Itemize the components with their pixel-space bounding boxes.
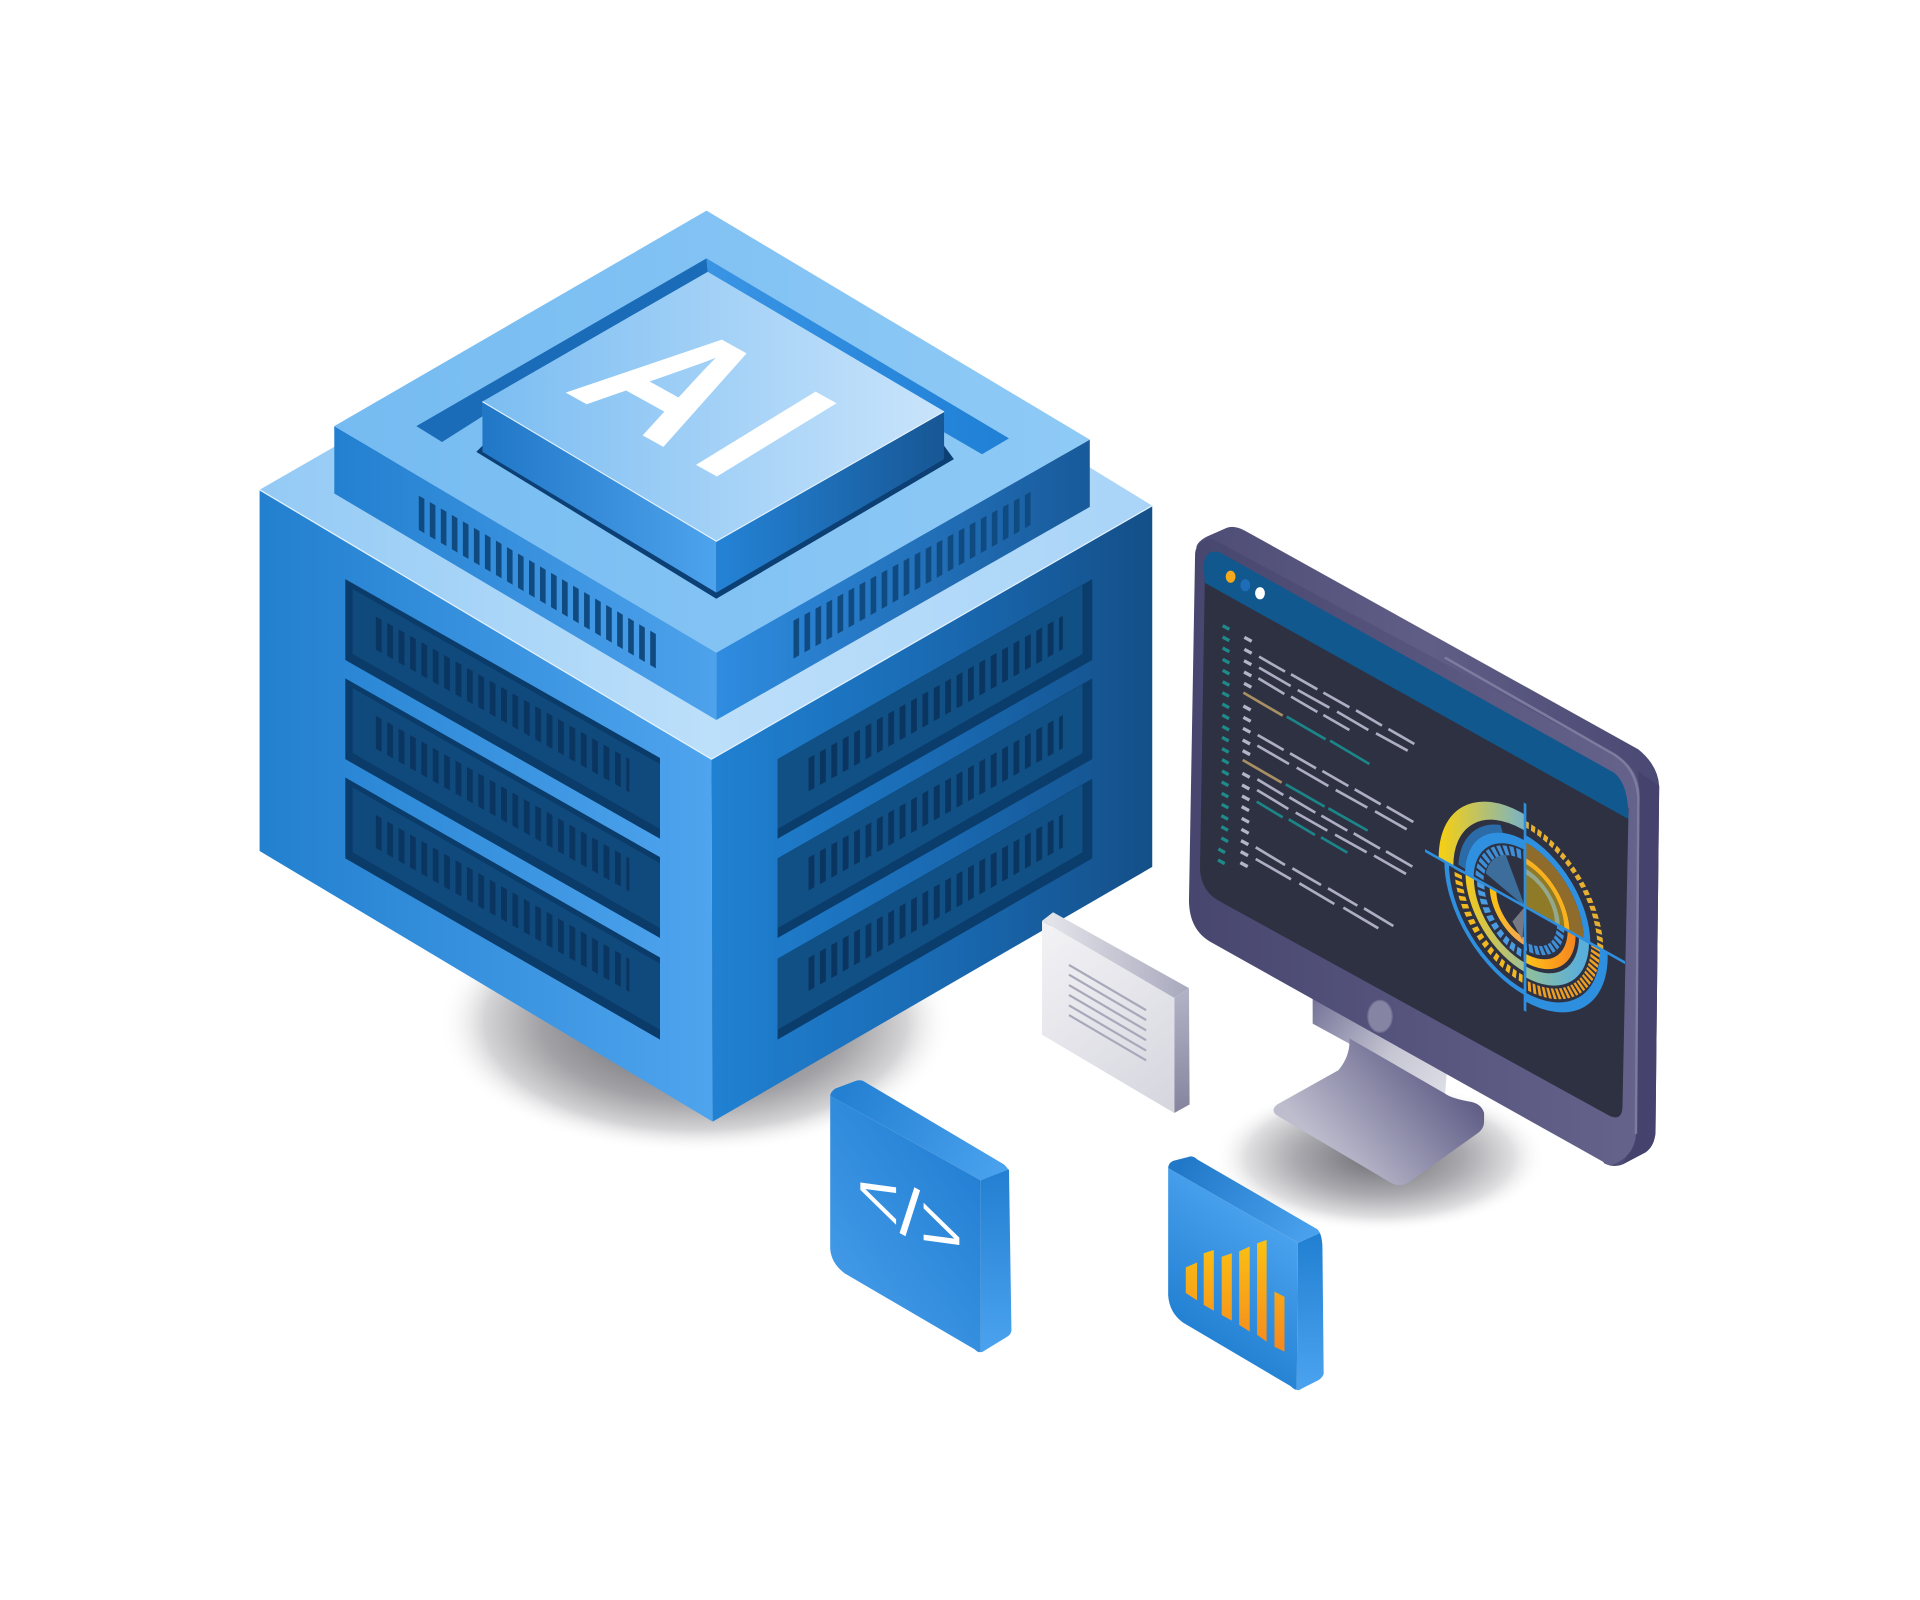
server shadow [438,891,953,1153]
AI lettering: AI [525,294,903,515]
right rack panel 3 [778,779,1092,1040]
monitor shadow [1213,1082,1547,1232]
window dots [1226,571,1265,599]
left rack panel 2 [345,678,660,938]
gauge upper-left quadrant [1438,802,1524,904]
monitor side [1622,771,1659,1164]
upper block top face [334,211,1090,653]
screen body [1200,576,1629,1117]
code symbol: </> [857,1142,963,1283]
AI server block [260,211,1152,1122]
right vent [791,491,1032,660]
chart card [1168,1156,1324,1390]
AI chip [482,272,944,593]
bar chart [1186,1240,1284,1352]
monitor back rim [1196,527,1659,1166]
white tokens [1240,637,1252,867]
gauge crosshair [1425,747,1625,1067]
radial gauge [1425,802,1625,1012]
chart card top edge [1168,1156,1320,1243]
tan code lines [1243,693,1283,783]
stand neck [1313,992,1447,1096]
right rack panel 2 [778,678,1092,938]
left vent [415,493,656,669]
code card face [830,1096,981,1352]
monitor [1189,527,1659,1166]
gauge lower-left quadrant [1444,863,1524,995]
monitor bezel [1189,539,1640,1166]
gauge upper-right quadrant [1526,821,1604,949]
code card [830,1080,1011,1352]
left rack panel 3 [345,778,660,1040]
gauge lower-right quadrant [1526,926,1608,1012]
upper block right face [716,440,1090,720]
monitor logo button [1368,1000,1392,1032]
line numbers [1218,626,1229,864]
code listing [1218,626,1414,928]
recess right wall [707,258,1009,454]
chip shadow [476,446,954,599]
stand foot [1273,1038,1484,1185]
code card side [981,1169,1011,1352]
server base top face [260,233,1152,759]
upper block left face [334,426,716,720]
chart card face [1168,1168,1298,1390]
server base right face [711,506,1152,1122]
right rack panel 1 [778,579,1092,839]
code lines [1256,657,1414,928]
document text lines [1069,965,1146,1060]
server base left face [260,490,713,1122]
chart card side [1297,1233,1324,1390]
teal code lines [1257,717,1369,853]
illustration canvas [260,210,1660,1390]
left rack panel 1 [345,579,660,839]
document card [1042,912,1190,1113]
screen title bar [1204,552,1629,819]
code card top edge [830,1080,1009,1180]
recess left wall [416,258,708,442]
monitor stand [1273,992,1484,1185]
